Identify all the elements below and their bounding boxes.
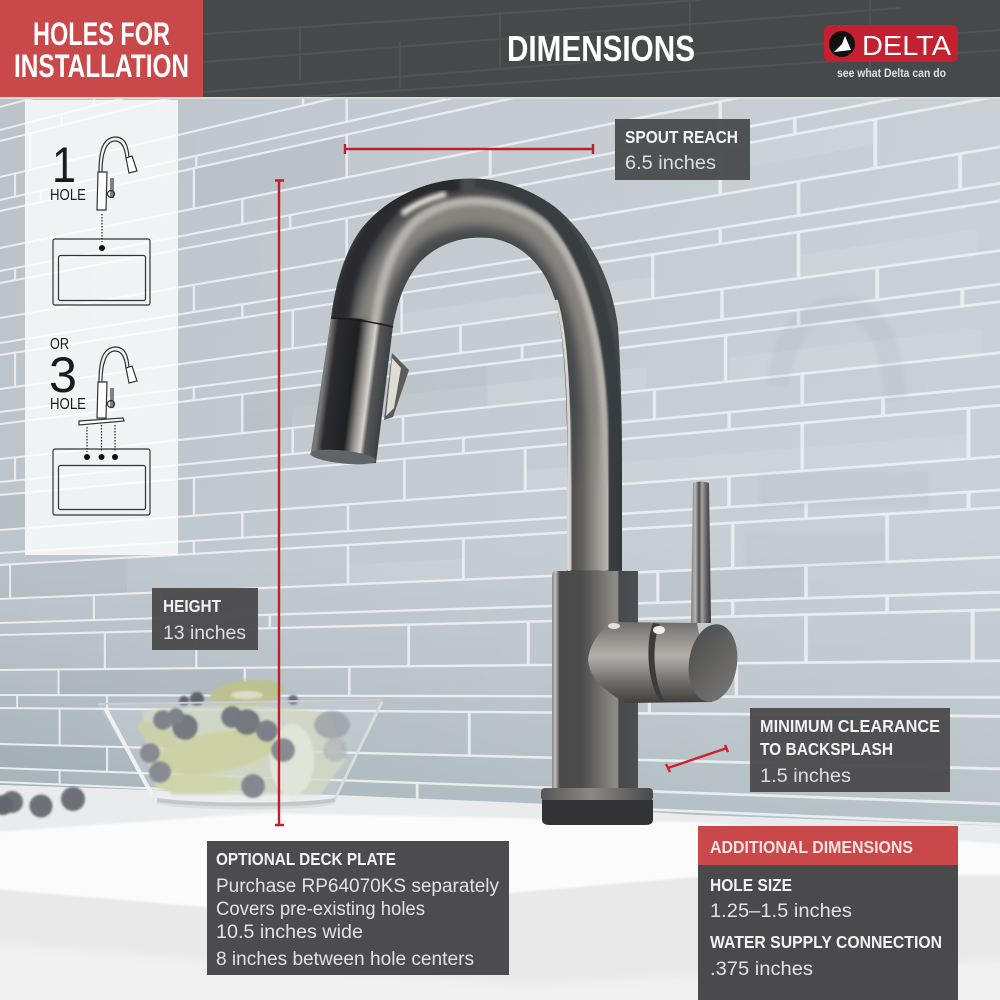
spray head [311, 318, 393, 464]
callout: spout reach: SPOUT REACH [625, 127, 738, 147]
fruit bowl [98, 676, 382, 808]
logo: Delta: see what Delta can do [837, 68, 946, 80]
callout: height: HEIGHT [163, 596, 221, 616]
three hole label [49, 336, 86, 413]
callout: optional deck plate: 10.5 inches wide [216, 922, 363, 943]
countertop [0, 785, 1000, 1000]
logo: Delta [824, 25, 958, 80]
blueberries on the counter [0, 787, 85, 818]
callout: minimum clearance: MINIMUM CLEARANCE [760, 716, 940, 736]
base body [552, 571, 638, 790]
title: DIMENSIONS [507, 28, 695, 69]
panel: additional dimensions [698, 826, 958, 1000]
additional dimensions header [698, 826, 958, 865]
panel: additional dimensions: HOLE SIZE [710, 875, 792, 895]
additional dimensions header: ADDITIONAL DIMENSIONS [710, 837, 913, 857]
panel: additional dimensions: 1.25–1.5 inches [710, 901, 852, 922]
three hole label: HOLE [50, 396, 86, 413]
red tab [0, 0, 203, 97]
glass [98, 702, 382, 808]
spout reach line [345, 144, 593, 154]
panel: additional dimensions: .375 inches [710, 959, 813, 980]
callout: optional deck plate: OPTIONAL DECK PLATE [216, 849, 396, 869]
three hole label: OR [50, 336, 69, 353]
callout: minimum clearance [750, 708, 950, 792]
handle disc [684, 621, 742, 705]
callout: minimum clearance: TO BACKSPLASH [760, 739, 893, 759]
callout: optional deck plate [207, 841, 509, 975]
icon: faucet with deck plate [79, 347, 137, 425]
spout [331, 178, 622, 571]
panel: additional dimensions: WATER SUPPLY CONNECTION [710, 932, 942, 952]
callout: optional deck plate: 8 inches between hole centers [216, 949, 474, 970]
height line [275, 180, 284, 825]
handle hub [588, 622, 712, 703]
clearance line [666, 745, 728, 772]
logo: Delta: DELTA [862, 30, 951, 61]
callout: spout reach: 6.5 inches [625, 153, 716, 174]
one hole label [50, 137, 86, 204]
stem bottom [567, 392, 622, 570]
base plate [542, 800, 653, 825]
sink with one hole [53, 214, 150, 305]
sink with three holes [53, 425, 150, 515]
panel: holes for installation [25, 100, 178, 555]
one hole label: HOLE [50, 187, 86, 204]
callout: optional deck plate: Purchase RP64070KS separately [216, 876, 499, 897]
lever [691, 482, 711, 623]
tab heading: INSTALLATION [14, 48, 189, 84]
one hole label: 1 [52, 137, 76, 193]
callout: height [152, 588, 258, 650]
icon: single hole faucet [97, 137, 137, 210]
base ring [541, 788, 653, 801]
callout: optional deck plate: Covers pre-existing holes [216, 899, 425, 920]
header bar [0, 0, 1000, 99]
kiwi and blueberries [134, 676, 350, 798]
spray head paddle [384, 353, 409, 420]
faucet [310, 170, 742, 825]
callout: height: 13 inches [163, 623, 246, 644]
faucet reflection on the wall [745, 308, 930, 550]
callout: minimum clearance: 1.5 inches [760, 766, 851, 787]
tab heading: HOLES FOR [33, 16, 170, 52]
callout: spout reach [615, 119, 750, 180]
three hole label: 3 [49, 347, 77, 403]
